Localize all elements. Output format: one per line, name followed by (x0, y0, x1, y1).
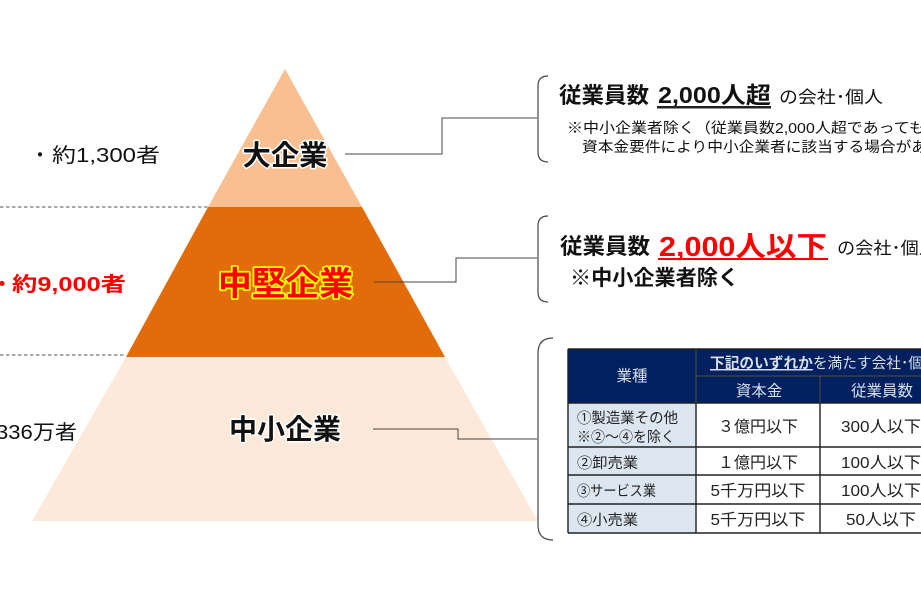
label: large enterprises: 大企業 (242, 140, 328, 171)
row 4: 5千万円以下 (710, 511, 806, 529)
row 3: 5千万円以下 (710, 482, 806, 500)
row 2: 100人以下 (841, 455, 921, 472)
value: 2,000 or fewer employees: 2,000人以下 (659, 231, 827, 262)
label: mid-sized enterprises: 中堅企業 (218, 265, 353, 302)
row label cells (568, 403, 696, 533)
row 1: ※②～④を除く (577, 429, 675, 446)
count: mid-sized enterprises (0, 273, 126, 296)
pyramid tier: large enterprises (208, 69, 362, 207)
connector: mid-sized enterprises (374, 258, 537, 282)
note line 2: 資本金要件により中小企業者に該当する場合があ (582, 139, 921, 156)
row 1: 300人以下 (841, 419, 921, 436)
row 3: 100人以下 (841, 483, 921, 500)
count: large enterprises: 約1,300者 (52, 144, 160, 167)
row 4: 50人以下 (846, 512, 916, 529)
row 1: ①製造業その他 (577, 410, 678, 427)
connector: small and medium enterprises (373, 429, 537, 439)
note: ※中小企業者除く (570, 267, 739, 290)
definition: mid-sized enterprises (560, 231, 921, 290)
row 1: ３億円以下 (718, 418, 798, 436)
row 2 (577, 454, 921, 472)
header: employees: 従業員数 (851, 382, 913, 400)
connector: large enterprises (345, 118, 537, 154)
pyramid (32, 69, 538, 521)
count: large enterprises (30, 144, 160, 167)
row 3 (577, 482, 921, 500)
row 1 (577, 410, 921, 446)
row 2: １億円以下 (718, 454, 798, 472)
value: over 2,000 employees: 2,000人超 (658, 82, 771, 108)
definition: large enterprises (559, 82, 921, 156)
suffix: の会社･個人 (779, 88, 883, 107)
header: industry: 業種 (616, 367, 648, 385)
heading: employee threshold up to 2,000: 従業員数 (560, 234, 650, 259)
value cells (696, 403, 921, 533)
bracket: mid-sized enterprises (538, 216, 548, 302)
row 4 (577, 511, 916, 529)
table header (568, 349, 921, 403)
definition table: small and medium enterprises (568, 349, 921, 533)
pyramid tier: mid-sized enterprises (126, 207, 445, 357)
dashed tier divider upper (0, 206, 208, 208)
note line 1: ※中小企業者除く（従業員数2,000人超であっても (567, 120, 921, 137)
bracket: small and medium enterprises (538, 338, 553, 540)
row 2: ②卸売業 (577, 455, 638, 472)
table lines (568, 349, 921, 533)
label: small and medium enterprises: 中小企業 (229, 414, 341, 445)
count: mid-sized enterprises: 約9,000者 (12, 273, 126, 296)
heading: employee threshold over 2,000: 従業員数 (559, 83, 649, 108)
header: capital: 資本金 (736, 382, 782, 400)
underline (657, 106, 771, 108)
dashed tier divider lower (0, 354, 126, 356)
bracket: large enterprises (538, 76, 548, 162)
row 4: ④小売業 (577, 512, 638, 529)
row 3: ③サービス業 (577, 483, 656, 500)
pyramid tier: small and medium enterprises (32, 357, 538, 521)
underline (658, 258, 828, 260)
count: large enterprises: ・ (30, 145, 50, 167)
